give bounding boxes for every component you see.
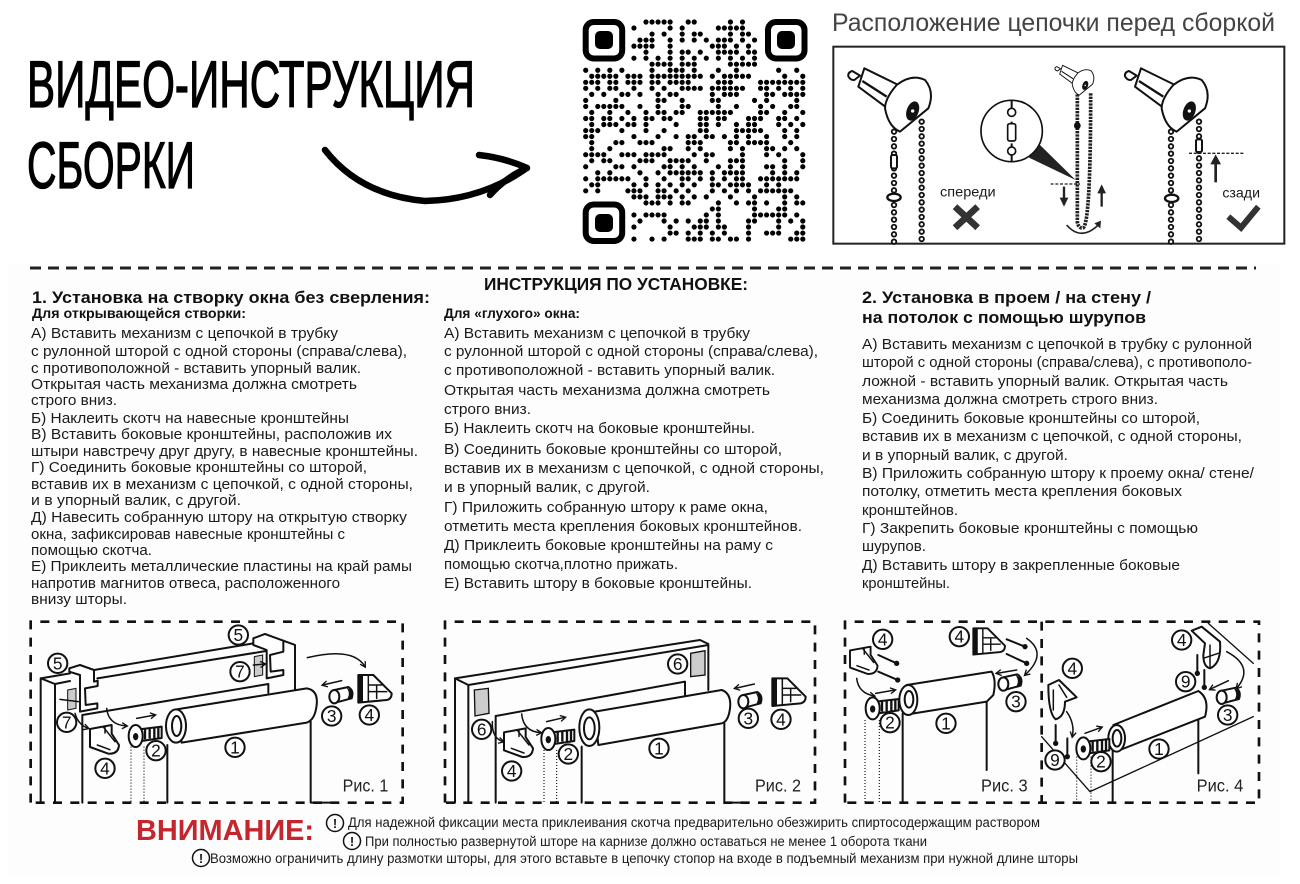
callouts: 4 bbox=[507, 761, 517, 781]
text block: installation on window sash: с рулонной шторой с одной стороны (справа/слева), bbox=[31, 344, 407, 360]
text block: installation on window sash: напротив магнитов отвеса, расположенного bbox=[31, 576, 340, 592]
callouts: 2 bbox=[151, 741, 161, 761]
text block: blind window: с рулонной шторой с одной стороны (справа/слева), bbox=[444, 344, 818, 360]
QR finder top left bbox=[586, 22, 622, 58]
divider top dashed line bbox=[30, 266, 1256, 270]
text block: installation on window sash: Для открывающейся створки: bbox=[32, 306, 246, 322]
text block: blind window: Г) Приложить собранную штору к раме окна, bbox=[444, 500, 768, 516]
text block: installation in opening: ложной - вставить упорный валик. Открытая часть bbox=[862, 374, 1228, 390]
callouts bbox=[48, 625, 379, 778]
text block: installation in opening: вставив их в механизм с цепочкой, с одной стороны, bbox=[862, 429, 1242, 445]
title: video instruction: ВИДЕО-ИНСТРУКЦИЯ bbox=[27, 47, 475, 121]
text block: installation in opening: кронштейнов. bbox=[862, 503, 958, 519]
note 1: ! bbox=[333, 816, 337, 831]
QR code bbox=[586, 22, 804, 241]
callouts: 2 bbox=[564, 744, 573, 764]
text block: installation on window sash: окна, зафиксировав навесные кронштейны с bbox=[31, 527, 345, 543]
text block: installation in opening: Г) Закрепить боковые кронштейны с помощью bbox=[862, 521, 1198, 537]
callouts: 4 bbox=[955, 627, 965, 647]
text block: installation on window sash: строго вниз. bbox=[31, 393, 117, 409]
callouts: 4 bbox=[776, 709, 786, 729]
text block: installation in opening: Д) Вставить штору в закрепленные боковые bbox=[862, 558, 1180, 574]
text block: blind window: строго вниз. bbox=[444, 402, 531, 418]
callouts: 5 bbox=[234, 625, 243, 645]
callouts: 3 bbox=[327, 706, 336, 726]
text block: blind window: отметить места крепления боковых кронштейнов. bbox=[444, 519, 802, 535]
text block: blind window: Открытая часть механизма должна смотреть bbox=[444, 383, 770, 399]
figure: Рис. 1 bbox=[31, 622, 403, 803]
text block: installation on window sash: 1. Установка на створку окна без сверления: bbox=[32, 288, 430, 307]
QR finder bottom left bbox=[586, 204, 622, 241]
text block: installation in opening: В) Приложить собранную штору к проему окна/ стене/ bbox=[862, 466, 1255, 482]
figure: Рис. 2: Рис. 2 bbox=[755, 776, 801, 796]
callouts bbox=[472, 654, 791, 781]
note 3: ! bbox=[199, 851, 203, 866]
text block: blind window: Е) Вставить штору в боковые кронштейны. bbox=[444, 576, 752, 592]
title: video instruction bbox=[27, 47, 475, 202]
text block: blind window: Для «глухого» окна: bbox=[444, 306, 580, 322]
figure: Рис. 3 and Рис. 4: Рис. 3 bbox=[981, 776, 1028, 796]
text block: installation on window sash: Г) Соединить боковые кронштейны со шторой, bbox=[31, 460, 367, 476]
text block: blind window: вставив их в механизм с цепочкой, с одной стороны, bbox=[444, 461, 824, 477]
callouts: 4 bbox=[878, 629, 888, 649]
arrow pointing to QR code bbox=[325, 150, 527, 201]
text block: installation in opening: А) Вставить механизм с цепочкой в трубку с рулонной bbox=[862, 337, 1252, 353]
text block: blind window: Б) Наклеить скотч на боковые кронштейны. bbox=[444, 421, 755, 437]
warning heading: ВНИМАНИЕ: bbox=[136, 815, 314, 847]
figure 4 drawing bbox=[1042, 623, 1253, 803]
diagram: chain behind (correct): сзади bbox=[1222, 185, 1260, 201]
callouts: 4 bbox=[365, 705, 375, 725]
text block: installation in opening: на потолок с помощью шурупов bbox=[862, 308, 1146, 327]
text block: installation on window sash: Б) Наклеить скотч на навесные кронштейны bbox=[31, 411, 349, 427]
text block: installation in opening: кронштейны. bbox=[862, 576, 950, 592]
callouts: 7 bbox=[62, 712, 71, 732]
callouts: 2 bbox=[1096, 752, 1106, 772]
callouts: 5 bbox=[53, 653, 62, 673]
callouts: 1 bbox=[1154, 739, 1164, 759]
callouts: 3 bbox=[744, 708, 753, 728]
text block: installation on window sash: В) Вставить боковые кронштейны, расположив их bbox=[31, 427, 393, 443]
text block: installation in opening: потолку, отметить места крепления боковых bbox=[862, 484, 1183, 500]
text block: blind window: В) Соединить боковые кронштейны со шторой, bbox=[444, 442, 782, 458]
text block: installation on window sash: Д) Навесить собранную штору на открытую створку bbox=[31, 510, 408, 526]
text block: installation in opening: механизма должна смотреть строго вниз. bbox=[862, 392, 1158, 408]
text block: installation in opening: и в упорный валик, с другой. bbox=[862, 448, 1068, 464]
diagram: chain behind (correct) bbox=[1125, 68, 1260, 242]
callouts: 4 bbox=[100, 758, 110, 778]
text block: installation on window sash: и в упорный валик, с другой. bbox=[31, 493, 241, 509]
callouts: 4 bbox=[1177, 630, 1187, 650]
callouts: 2 bbox=[885, 713, 895, 733]
text block: installation on window sash bbox=[31, 288, 430, 608]
text block: installation in opening: шторой с одной стороны (справа/слева), с противополо- bbox=[862, 355, 1252, 371]
text block: blind window: и в упорный валик, с другой. bbox=[444, 480, 650, 496]
callouts: 6 bbox=[477, 719, 486, 739]
text block: installation in opening bbox=[862, 288, 1255, 592]
text block: blind window: Д) Приклеить боковые кронштейны на раму с bbox=[444, 538, 773, 554]
callouts: 9 bbox=[1181, 672, 1190, 692]
text block: installation in opening: шурупов. bbox=[862, 539, 926, 555]
callouts: 3 bbox=[1223, 705, 1232, 725]
callouts: 1 bbox=[654, 738, 664, 758]
text block: blind window: с противоположной - вставить упорный валик. bbox=[444, 363, 775, 379]
text block: installation in opening: Б) Соединить боковые кронштейны со шторой, bbox=[862, 411, 1200, 427]
text block: installation on window sash: помощью скотча. bbox=[31, 543, 152, 559]
text block: installation on window sash: Открытая часть механизма должна смотреть bbox=[31, 377, 357, 393]
figure 3 drawing bbox=[850, 628, 1037, 803]
callouts: 4 bbox=[1068, 658, 1078, 678]
callouts: 9 bbox=[1050, 750, 1060, 770]
callouts: 3 bbox=[1011, 692, 1021, 712]
text block: installation on window sash: А) Вставить механизм с цепочкой в трубку bbox=[31, 326, 339, 342]
text block: blind window: А) Вставить механизм с цепочкой в трубку bbox=[444, 326, 751, 342]
callouts: 1 bbox=[941, 713, 951, 733]
title: video instruction: СБОРКИ bbox=[27, 128, 195, 202]
text block: blind window: помощью скотча,плотно прижать. bbox=[444, 557, 678, 573]
text block: installation on window sash: внизу шторы. bbox=[31, 592, 127, 608]
panel: chain position diagrams bbox=[833, 47, 1284, 244]
warning notes bbox=[192, 814, 1078, 866]
text block: installation on window sash: с противоположной - вставить упорный валик. bbox=[31, 361, 361, 377]
text block: installation on window sash: Е) Приклеить металлические пластины на край рамы bbox=[31, 559, 412, 575]
callouts bbox=[873, 627, 1237, 772]
figure: Рис. 3 and Рис. 4: Рис. 4 bbox=[1197, 776, 1244, 796]
heading: chain position: Расположение цепочки перед сборкой bbox=[832, 9, 1275, 37]
diagram: chain in front (wrong) bbox=[848, 68, 996, 242]
figure: Рис. 3 and Рис. 4 bbox=[845, 622, 1259, 803]
diagram: chain in front (wrong): спереди bbox=[940, 184, 996, 200]
text block: installation in opening: 2. Установка в проем / на стену / bbox=[862, 288, 1151, 307]
note 2: ! bbox=[350, 834, 354, 849]
note 1: Для надежной фиксации места приклеивания скотча предварительно обезжирить спиртосодержащим раствором bbox=[348, 815, 1040, 830]
figure: Рис. 1: Рис. 1 bbox=[343, 776, 388, 796]
text block: installation on window sash: вставив их в механизм с цепочкой, с одной стороны, bbox=[31, 477, 413, 493]
callouts: 7 bbox=[235, 662, 245, 682]
figure: Рис. 2 bbox=[445, 622, 815, 803]
QR finder top right bbox=[768, 22, 804, 58]
note 3: Возможно ограничить длину размотки шторы, для этого вставьте в цепочку стопор на входе в подъемный механизм при нужной длине шторы bbox=[210, 851, 1078, 866]
diagram: chain direction bbox=[981, 65, 1106, 233]
heading: installation instruction: ИНСТРУКЦИЯ ПО УСТАНОВКЕ: bbox=[484, 274, 748, 294]
callouts: 1 bbox=[230, 737, 240, 757]
text block: installation on window sash: штыри навстречу друг другу, в навесные кронштейны. bbox=[31, 444, 418, 460]
callouts: 6 bbox=[673, 654, 682, 674]
text block: blind window bbox=[444, 306, 824, 592]
QR dots bbox=[586, 22, 803, 239]
note 2: При полностью развернутой шторе на карнизе должно оставаться не менее 1 оборота ткани bbox=[365, 834, 927, 849]
